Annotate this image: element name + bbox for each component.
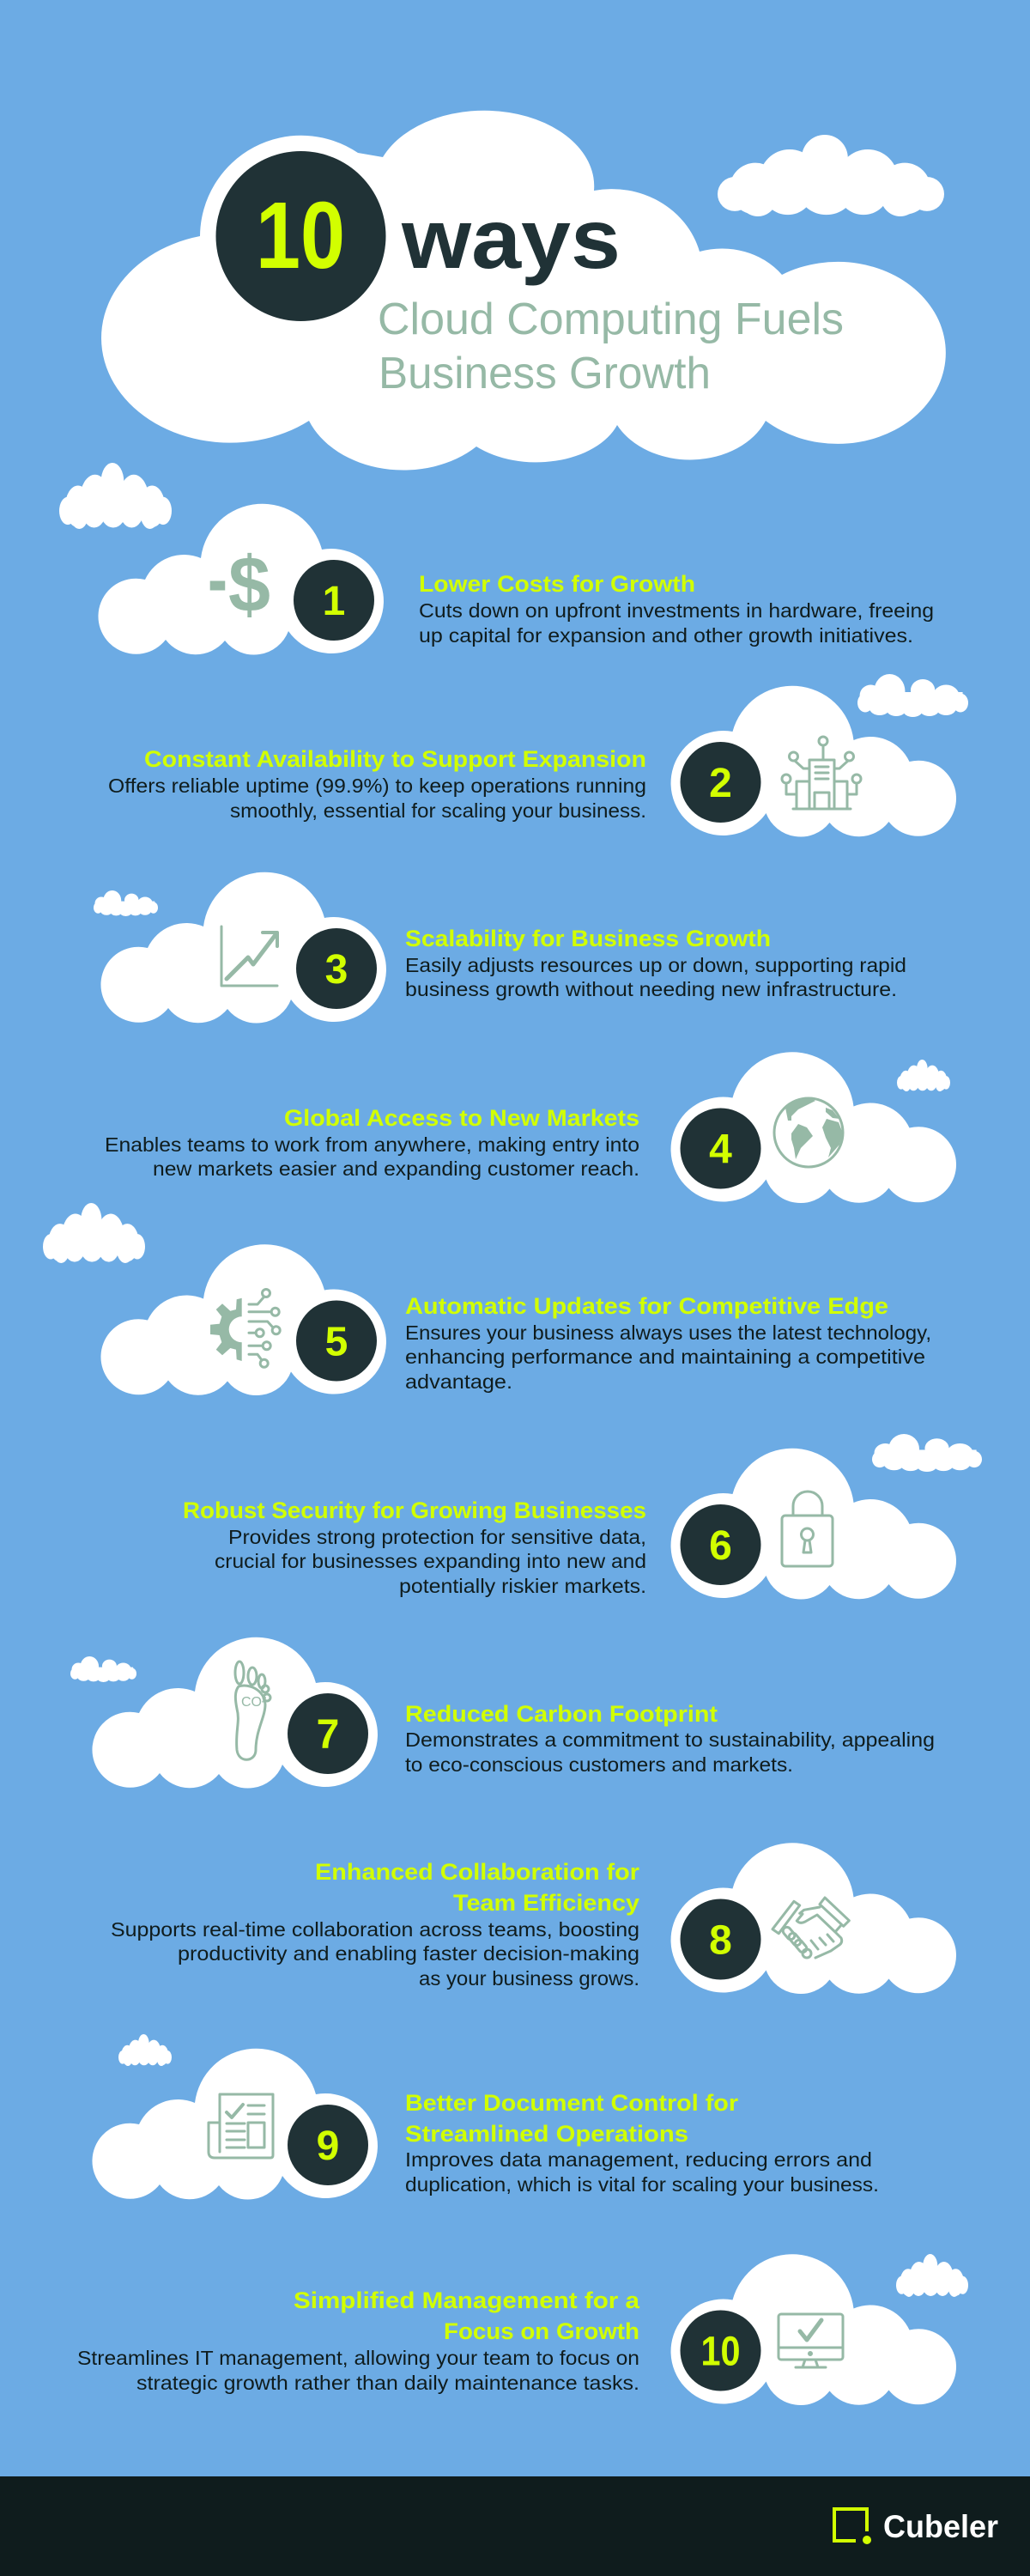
panel: 8 collaboration xyxy=(111,1843,956,1994)
text: document control: Improves data management, reducing errors and xyxy=(405,2148,872,2171)
panel: 10 simplified management xyxy=(77,2254,956,2405)
panel: 9 document control xyxy=(92,2049,879,2200)
text: simplified management: strategic growth rather than daily maintenance tasks. xyxy=(136,2372,639,2394)
text: document control xyxy=(405,2090,879,2196)
panel: 7 carbon footprint: 7 xyxy=(317,1712,339,1758)
text: security: Provides strong protection for sensitive data, xyxy=(228,1526,646,1548)
panel: 2 availability: 2 xyxy=(709,761,732,806)
panel: 2 availability xyxy=(108,686,956,837)
icon: connected building xyxy=(782,737,861,809)
text: lower costs: up capital for expansion and other growth initiatives. xyxy=(419,624,913,647)
title cloud xyxy=(101,111,946,471)
icon: document xyxy=(209,2094,273,2158)
icon: minus dollar: $ xyxy=(228,541,270,629)
text: simplified management: Focus on Growth xyxy=(444,2318,639,2344)
text: document control: duplication, which is vital for scaling your business. xyxy=(405,2173,879,2196)
text: collaboration: Supports real-time collaboration across teams, boosting xyxy=(111,1918,639,1941)
icon: growth chart xyxy=(221,927,277,986)
text: document control: Streamlined Operations xyxy=(405,2121,688,2147)
panel: 8 collaboration: 8 xyxy=(709,1918,732,1963)
text: collaboration xyxy=(111,1859,640,1990)
logo: Cubeler: Cubeler xyxy=(883,2509,998,2544)
icon: footprint: CO² xyxy=(241,1695,267,1710)
text: carbon footprint: to eco-conscious customers and markets. xyxy=(405,1753,793,1776)
text: carbon footprint: Reduced Carbon Footprint xyxy=(405,1701,718,1727)
panel: 4 global access: 4 xyxy=(709,1127,732,1173)
text: collaboration: as your business grows. xyxy=(419,1967,639,1990)
text: security: Robust Security for Growing Businesses xyxy=(183,1498,646,1523)
footer band xyxy=(0,2476,1030,2576)
text: scalability: business growth without needing new infrastructure. xyxy=(405,978,897,1000)
text: document control: Better Document Control for xyxy=(405,2090,739,2116)
text: lower costs: Cuts down on upfront investments in hardware, freeing xyxy=(419,599,934,622)
icon: globe xyxy=(774,1098,843,1167)
text: automatic updates: Ensures your business always uses the latest technology, xyxy=(405,1321,931,1344)
text: global access: Enables teams to work from anywhere, making entry into xyxy=(105,1133,639,1156)
text: simplified management: Streamlines IT management, allowing your team to focus on xyxy=(77,2347,639,2369)
text: availability xyxy=(108,746,646,822)
panel: 1 lower costs xyxy=(98,504,934,655)
title: ways: ways xyxy=(401,191,621,286)
panel: 6 security xyxy=(183,1449,956,1600)
subtitle xyxy=(378,295,844,398)
text: simplified management: Simplified Management for a xyxy=(294,2287,640,2313)
text: scalability: Scalability for Business Growth xyxy=(405,926,771,951)
text: carbon footprint xyxy=(405,1701,935,1776)
icon: gear circuit xyxy=(210,1290,280,1367)
text: automatic updates: advantage. xyxy=(405,1370,512,1393)
icon: padlock xyxy=(782,1492,833,1566)
text: security: crucial for businesses expanding into new and xyxy=(215,1550,646,1572)
text: collaboration: Team Efficiency xyxy=(453,1890,639,1916)
subtitle: Cloud Computing Fuels xyxy=(378,295,844,344)
text: global access: new markets easier and expanding customer reach. xyxy=(153,1157,639,1180)
text: simplified management xyxy=(77,2287,640,2394)
decorative small clouds xyxy=(43,135,982,2297)
badge: 10 xyxy=(216,151,386,321)
text: security: potentially riskier markets. xyxy=(399,1575,646,1597)
text: global access xyxy=(105,1105,639,1180)
text: lower costs: Lower Costs for Growth xyxy=(419,571,695,597)
panel: 5 automatic updates: 5 xyxy=(325,1319,348,1365)
panel: 3 scalability xyxy=(100,872,906,1024)
panel: 3 scalability: 3 xyxy=(325,947,348,993)
logo: Cubeler xyxy=(834,2509,998,2544)
text: automatic updates: Automatic Updates for Competitive Edge xyxy=(405,1293,888,1319)
icon: handshake xyxy=(772,1898,849,1958)
text: automatic updates xyxy=(405,1293,931,1393)
text: global access: Global Access to New Markets xyxy=(284,1105,639,1131)
text: collaboration: productivity and enabling faster decision-making xyxy=(178,1942,639,1965)
text: security xyxy=(183,1498,646,1597)
text: automatic updates: enhancing performance and maintaining a competitive xyxy=(405,1346,925,1368)
icon: monitor with check xyxy=(779,2314,843,2367)
text: carbon footprint: Demonstrates a commitment to sustainability, appealing xyxy=(405,1728,935,1751)
panel: 6 security: 6 xyxy=(709,1523,732,1569)
subtitle: Business Growth xyxy=(379,349,711,398)
panel: 10 simplified management: 10 xyxy=(700,2329,740,2375)
text: scalability: Easily adjusts resources up or down, supporting rapid xyxy=(405,954,906,976)
text: collaboration: Enhanced Collaboration for xyxy=(315,1859,640,1885)
text: lower costs xyxy=(419,571,934,647)
icon: footprint xyxy=(235,1662,270,1759)
text: availability: smoothly, essential for scaling your business. xyxy=(230,799,646,822)
panel: 9 document control: 9 xyxy=(317,2123,339,2169)
text: availability: Constant Availability to Support Expansion xyxy=(144,746,646,772)
panel: 7 carbon footprint xyxy=(92,1637,935,1789)
badge: 10: 10 xyxy=(256,183,345,289)
panel: 1 lower costs: 1 xyxy=(323,579,345,624)
text: scalability xyxy=(405,926,906,1000)
panel: 4 global access xyxy=(105,1052,956,1203)
text: availability: Offers reliable uptime (99.9%) to keep operations running xyxy=(108,775,646,797)
panel: 5 automatic updates xyxy=(100,1244,931,1395)
icon: minus dollar: - xyxy=(208,536,227,623)
